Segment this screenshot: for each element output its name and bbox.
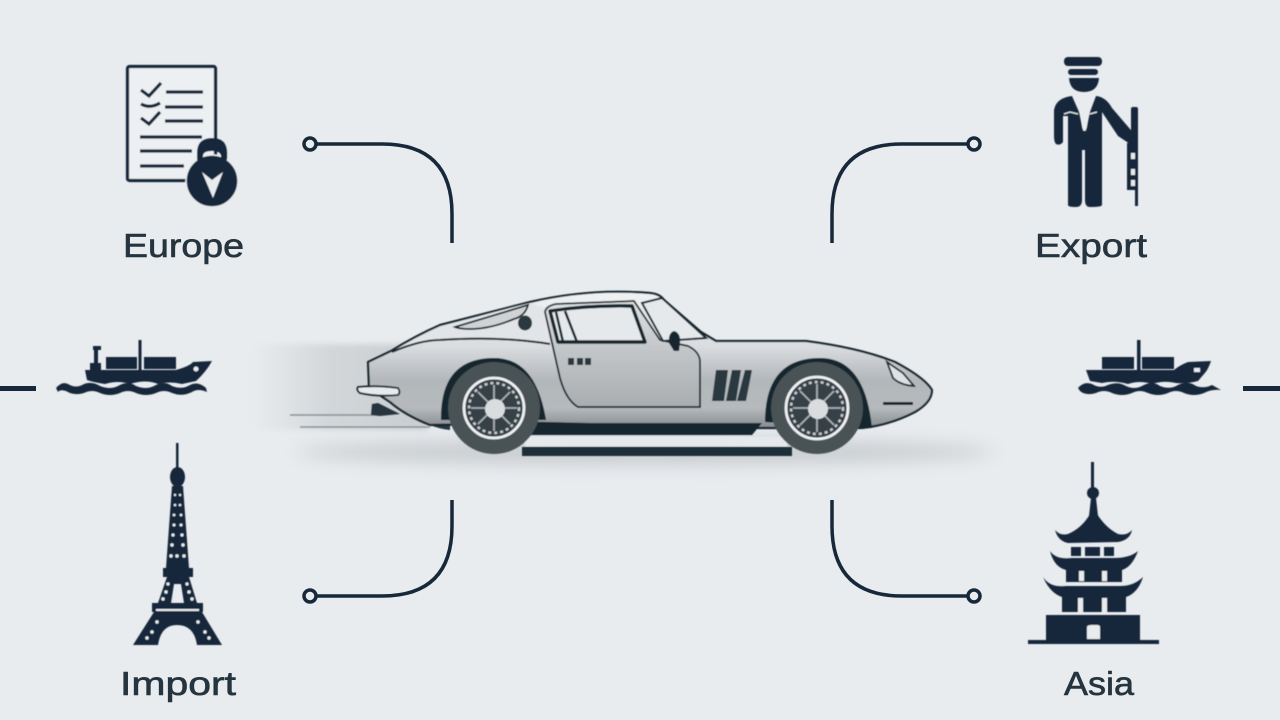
rear vent (518, 316, 532, 330)
fender vents (712, 370, 752, 401)
floor shadow (522, 447, 792, 456)
rear undercarriage (371, 403, 400, 416)
rear under shadow (415, 416, 450, 430)
left track segment (0, 386, 36, 391)
window bars (556, 311, 577, 342)
icon: checklist document with padlock (128, 66, 238, 207)
connector: top right (832, 138, 980, 243)
beltline (392, 339, 550, 352)
connector: bottom left (304, 500, 452, 602)
headlight (887, 362, 914, 386)
rear wheel arch (441, 358, 546, 420)
label: Europe: Europe (123, 227, 244, 264)
front wheel (771, 362, 863, 454)
sill highlight (525, 437, 787, 446)
label: Export: Export (1035, 227, 1147, 264)
ground shadow (295, 440, 995, 464)
motion blur trail (248, 344, 428, 430)
door panel (545, 301, 700, 407)
right track segment (1243, 386, 1280, 391)
icon: uniformed officer with ladder (1054, 57, 1138, 207)
icon: Eiffel Tower (133, 443, 222, 645)
rear bumper (357, 386, 400, 396)
mirror (669, 331, 680, 351)
windshield (642, 298, 706, 341)
icon: cargo ship right (1078, 340, 1221, 395)
label: Asia: Asia (1064, 665, 1135, 702)
rear pillar highlight (392, 303, 550, 352)
badge (568, 358, 591, 365)
connector: bottom right (832, 500, 980, 602)
front marker line (883, 402, 913, 405)
side window (550, 306, 645, 342)
rear quarter window (455, 305, 528, 329)
speed lines (290, 415, 430, 427)
label: Import: Import (120, 665, 236, 702)
car body (368, 292, 932, 428)
car (290, 292, 932, 456)
front wheel arch (765, 358, 872, 428)
rear wheel (448, 362, 540, 454)
icon: pagoda (1028, 462, 1159, 644)
connector: top left (304, 138, 452, 243)
icon: cargo ship left (56, 340, 212, 395)
underbody (530, 423, 762, 435)
